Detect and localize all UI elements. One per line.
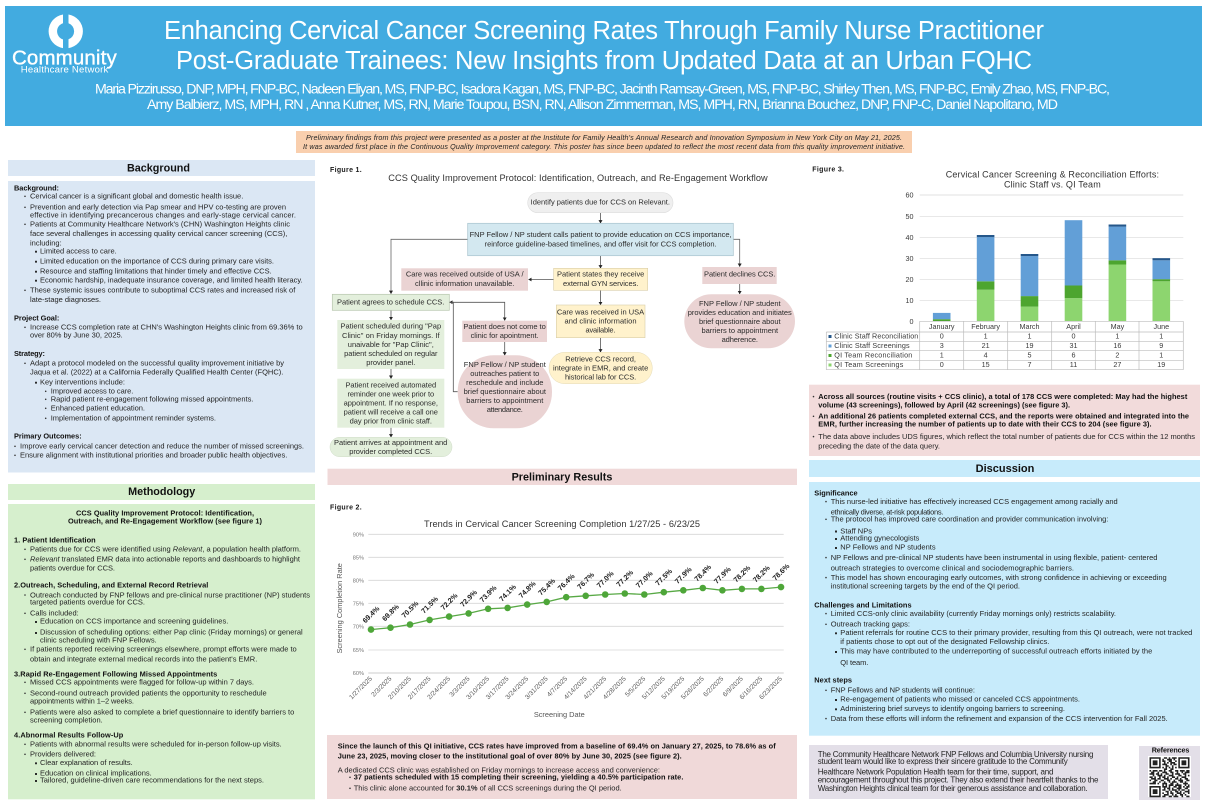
panel: discussion: The protocol has improved care coordination and provider communication involving:: [831, 515, 1108, 524]
panel: background: Implementation of appointment reminder systems.: [51, 414, 216, 423]
panel: methodology: Missed CCS appointments were flagged for follow-up within 7 days.: [30, 678, 254, 687]
data labels: 70.5%: [400, 599, 421, 620]
panel: figure 3 summary: Across all sources (routine visits + CCS clinic), a total of 178 CCS were completed: May had the highest: [818, 392, 1188, 401]
panel: background: Jaqua et al. (2022) at a California Federally Qualified Health Center (FQHC).: [30, 368, 283, 377]
figure 3: stacked bar chart with data table: [812, 167, 1183, 370]
panel: background: Strategy:: [14, 349, 45, 358]
panel: background: face several challenges in accessing quality cervical cancer screening (CCS),: [30, 229, 287, 238]
x axis date labels: 5/19/2025: [661, 675, 686, 701]
panel: methodology: [8, 504, 315, 799]
panel: background: Patients at Community Healthcare Network's (CHN) Washington Heights clinic: [30, 220, 290, 229]
y axis labels: 75%: [353, 601, 364, 607]
table values: 1: [984, 332, 988, 341]
panel: figure 3 summary: An additional 26 patients completed external CCS, and the reports were obtained and integrated into the: [818, 412, 1189, 421]
step: automated reminder: Patient received automated: [345, 380, 436, 389]
step: CCS completed: [330, 437, 452, 457]
panel: background: [8, 181, 315, 472]
panel: figure 3 summary: EMR, further increasing the number of patients up to date with their CCS to 204 (see figure 3).: [818, 420, 1152, 429]
step: retrieve record: historical lab for CCS.: [565, 372, 636, 381]
figure 1: workflow flowchart: CCS Quality Improvement Protocol: Identification, Outreach, and Re-Engagement Workflow: [388, 173, 768, 183]
data labels: [361, 561, 792, 625]
step: automated reminder: [337, 379, 444, 428]
panel: background: effective in identifying precancerous changes and early-stage cervical cancer.: [30, 211, 296, 220]
panel: preliminary results summary: [327, 735, 797, 799]
x axis date labels: 6/23/2025: [758, 675, 784, 701]
data labels: 78.2%: [751, 563, 772, 584]
panel: acknowledgements: [809, 745, 1108, 799]
y axis labels: 20: [906, 275, 914, 284]
step: retrieve record: [549, 352, 652, 384]
panel: methodology: Discussion of scheduling options: either Pap clinic (Friday mornings) or general: [40, 628, 303, 637]
step: missed appointment: Patient does not come to: [463, 322, 546, 331]
figure 3: stacked bar chart with data table: Cervical Cancer Screening & Reconciliation Efforts:: [946, 169, 1159, 179]
panel: background: Adapt a protocol modeled on the successful quality improvement initiative by: [30, 359, 284, 368]
title: [164, 17, 1044, 75]
panel: discussion: [809, 482, 1200, 736]
data labels: 76.7%: [575, 570, 596, 591]
step: automated reminder: appointment. If no response,: [344, 398, 438, 407]
step: education on decline: adherence.: [722, 335, 758, 344]
figure 3: stacked bar chart with data table: Figure 3.: [812, 167, 844, 174]
step: care outside USA: Care was received outside of USA /: [406, 270, 524, 279]
x axis date labels: 3/3/2025: [448, 675, 472, 699]
table values: 6: [1072, 351, 1076, 360]
panel: preliminary results summary: June 23, 2025, moving closer to the institutional goal of over 80% by June 30, 2025 (see figure 2).: [338, 752, 682, 761]
step: outreach to reschedule: reschedule and include: [466, 378, 543, 387]
panel: background: Background:: [14, 184, 59, 193]
panel: background: Key interventions include:: [40, 378, 125, 387]
data labels: 72.2%: [439, 591, 460, 612]
table values: February: [971, 322, 1000, 331]
step: pap clinic scheduled: provider panel.: [366, 358, 415, 367]
panel: figure 3 summary: The data above includes UDS figures, which reflect the total number of patients due for CCS within the 12 months: [818, 432, 1195, 441]
icon: QR code: [1148, 756, 1191, 797]
data labels: 77.0%: [595, 569, 616, 590]
step: care in USA: available.: [586, 325, 616, 334]
panel: references with QR code: References: [1152, 745, 1189, 754]
panel: discussion: This model has shown encouraging early outcomes, with strong confidence in achieving or exceeding: [831, 573, 1167, 582]
data labels: 71.5%: [419, 594, 440, 615]
panel: background: Limited access to care.: [40, 247, 117, 256]
panel: discussion: FNP Fellows and NP students will continue:: [831, 686, 975, 695]
panel: methodology: 2.Outreach, Scheduling, and External Record Retrieval: [14, 581, 208, 590]
panel: discussion: institutional screening targets by the end of the QI period.: [831, 582, 1020, 591]
panel: methodology: Calls included:: [30, 609, 79, 618]
panel: acknowledgements: Healthcare Network Population Health team for their time, support, and: [818, 767, 1053, 776]
panel: discussion: Staff NPs: [840, 526, 872, 535]
x axis date labels: 3/17/2025: [485, 675, 511, 701]
authors: [95, 81, 1110, 113]
flowchart connectors: [391, 213, 740, 437]
panel: background: Increase CCS completion rate at CHN's Washington Heights clinic from 69.36% to: [30, 323, 303, 332]
x axis date labels: 4/21/2025: [582, 675, 608, 701]
step: care in USA: [556, 305, 645, 338]
panel: discussion: NP Fellows and pre-clinical NP students have been instrumental in using flexible, patient- centered: [831, 553, 1157, 562]
panel: methodology: CCS Quality Improvement Protocol: Identification,: [76, 509, 254, 518]
table values: 5: [1028, 351, 1032, 360]
data labels: 72.9%: [458, 588, 479, 609]
panel: figure 3 summary: preceding the date of the data query.: [818, 442, 940, 451]
step: identify patients: Identify patients due for CCS on Relevant.: [531, 198, 670, 207]
table values: 1: [1159, 332, 1163, 341]
x axis date labels: 3/24/2025: [504, 675, 530, 701]
table values: 16: [1113, 341, 1121, 350]
authors: Maria Pizzirusso, DNP, MPH, FNP-BC, Nadeen Eliyan, MS, FNP-BC, Isadora Kagan, MS, FNP-BC, Jacinth Ramsay-Green, MS, FNP-BC, Shirley Then, MS, FNP-BC, Emily Zhao, MS, FNP-BC,: [95, 81, 1110, 97]
panel: discussion: Limited CCS-only clinic availability (currently Friday mornings only) restricts scalability.: [831, 609, 1116, 618]
x axis date labels: 5/12/2025: [641, 675, 667, 701]
panel: preliminary results summary: Since the launch of this QI initiative, CCS rates have improved from a baseline of 69.4% on January 27, 2025, to 78.6% as of: [338, 742, 776, 751]
step: care outside USA: cllinic information unavailable.: [415, 279, 514, 288]
step: outreach to reschedule: barriers to appointment: [466, 396, 544, 405]
table values: 11: [1070, 360, 1077, 369]
panel: methodology: Outreach, and Re-Engagement Workflow (see figure 1): [68, 517, 263, 526]
title: Post-Graduate Trainees: New Insights from Updated Data at an Urban FQHC: [176, 47, 1032, 75]
x axis date labels: 5/5/2025: [624, 675, 647, 699]
x axis date labels: 6/2/2025: [702, 675, 726, 699]
table values: 4: [984, 351, 988, 360]
table values: 2: [1115, 351, 1119, 360]
step: education on decline: brief questionnaire about: [699, 317, 782, 326]
table values: 19: [1026, 341, 1034, 350]
table values: March: [1020, 322, 1039, 331]
table legend: QI Team Reconciliation: [834, 351, 912, 360]
panel: methodology: clinic scheduling with FNP Fellows.: [40, 635, 157, 644]
y axis title: Screening Completion Rate: [335, 563, 344, 653]
panel: acknowledgements: The Community Healthcare Network FNP Fellows and Columbia University nursing: [818, 750, 1093, 759]
panel: discussion: NP Fellows and NP students: [840, 543, 936, 552]
x axis date labels: 5/26/2025: [680, 675, 706, 701]
panel: discussion: if patients chose to opt out of the designated Fellowship clinics.: [840, 637, 1049, 646]
table values: 19: [1157, 360, 1165, 369]
y axis labels: 50: [906, 212, 914, 221]
panel: methodology: Patients were also asked to complete a brief questionnaire to identify barriers to: [30, 708, 294, 717]
panel: preliminary results summary: A dedicated CCS clinic was established on Friday mornings to increase access and convenience:: [338, 766, 660, 775]
authors: Amy Balbierz, MS, MPH, RN , Anna Kutner, MS, RN, Marie Toupou, BSN, RN, Allison Zimmerman, MS, MPH, RN, Brianna Bouchez, DNP, FNP-C, Daniel Napolitano, MD: [147, 97, 1058, 113]
y axis labels: 80%: [353, 578, 364, 584]
data labels: 77.2%: [614, 568, 636, 589]
table values: 27: [1113, 360, 1121, 369]
step: outreach to reschedule: [458, 355, 552, 428]
panel: background: including:: [30, 239, 62, 248]
step: pap clinic scheduled: [337, 320, 444, 369]
step: call patient: [468, 223, 733, 256]
step: education on decline: barriers to appointment: [701, 326, 779, 335]
step: retrieve record: integrate in EMR, and create: [553, 364, 648, 372]
x axis date labels: 6/16/2025: [739, 675, 765, 701]
panel: background: Economic hardship, inadequate insurance coverage, and limited health literacy.: [40, 276, 303, 285]
panel: preliminary results summary: This clinic alone accounted for 30.1% of all CCS screenings during the QI period.: [354, 784, 622, 793]
heading: preliminary results: [328, 469, 797, 485]
table legend: [828, 332, 918, 369]
table values: 9: [1159, 341, 1163, 350]
panel: background: Prevention and early detection via Pap smear and HPV co-testing are proven: [30, 203, 286, 212]
data labels: 69.4%: [361, 604, 382, 625]
step: external GYN services: [554, 268, 648, 290]
x axis date labels: 2/10/2025: [387, 675, 413, 701]
figure 2: line chart: [330, 505, 792, 719]
step: education on decline: [684, 294, 795, 348]
table values: 0: [940, 332, 944, 341]
table values: 7: [1028, 360, 1032, 369]
panel: background: Rapid patient re-engagement following missed appointments.: [51, 395, 253, 404]
heading: preliminary results: Preliminary Results: [512, 471, 612, 483]
panel: background: over 80% by June 30, 2025.: [30, 331, 123, 340]
step: call patient: FNP Fellow / NP student calls patient to provide education on CCS importance,: [470, 230, 732, 239]
step: care in USA: and clinic information: [564, 316, 636, 325]
note: preliminary findings: Preliminary findings from this project were presented as a poster at the Institute for Family Health's Annual Research and Innovation Symposium in New York City on May 21, 2025.: [306, 133, 902, 142]
panel: references with QR code: [1139, 745, 1200, 800]
step: external GYN services: external GYN services.: [563, 279, 638, 288]
x axis date labels: 6/9/2025: [722, 675, 745, 699]
x axis date labels: 2/17/2025: [407, 675, 433, 701]
step: care outside USA: [401, 268, 528, 291]
panel: methodology: screening completion.: [30, 716, 103, 725]
panel: background: Project Goal:: [14, 314, 59, 323]
table values: 31: [1070, 341, 1078, 350]
panel: discussion: Next steps: [814, 676, 852, 685]
panel: acknowledgements: Washington Heights clinical team for their generous assistance and collaboration.: [818, 784, 1088, 793]
panel: background: These systemic issues contribute to suboptimal CCS rates and increased risk of: [30, 286, 296, 295]
panel: methodology: Patients with abnormal results were scheduled for in-person follow-up visits.: [30, 740, 282, 749]
panel: discussion: This may have contributed to the underreporting of successful outreach efforts initiated by the: [840, 647, 1152, 656]
panel: methodology: appointments within 1–2 weeks.: [30, 697, 134, 706]
y axis labels: 30: [906, 254, 914, 263]
panel: acknowledgements: encouragement throughout this project. They also extend their heartfelt thanks to the: [818, 775, 1099, 784]
panel: discussion: Re-engagement of patients who missed or canceled CCS appointments.: [840, 695, 1080, 704]
table legend: Clinic Staff Screenings: [834, 341, 910, 350]
table values: June: [1154, 322, 1169, 331]
step: education on decline: FNP Fellow / NP student: [699, 299, 782, 308]
panel: discussion: Patient referrals for routine CCS to their primary provider, resulting from this QI outreach, were not tracked: [840, 628, 1192, 637]
y axis labels: 85%: [353, 555, 364, 561]
step: automated reminder: patient will receive a call one: [344, 407, 438, 416]
panel: methodology: Providers delivered:: [30, 750, 96, 759]
step: identify patients: [528, 193, 673, 213]
y axis labels: 10: [906, 296, 914, 305]
panel: methodology: Relevant translated EMR data into actionable reports and dashboards to highlight: [30, 555, 301, 564]
table values: 1: [1159, 351, 1163, 360]
y axis labels: 40: [906, 233, 914, 242]
step: outreach to reschedule: FNP Fellow / NP student: [464, 360, 547, 369]
table values: [929, 322, 1169, 369]
panel: methodology: Second-round outreach provided patients the opportunity to reschedule: [30, 689, 267, 698]
panel: figure 3 summary: [809, 385, 1200, 456]
step: patient declines: [702, 267, 777, 284]
step: pap clinic scheduled: patient scheduled on regular: [344, 349, 438, 358]
panel: methodology: 1. Patient Identification: [14, 536, 96, 545]
table values: 15: [982, 360, 990, 369]
step: CCS completed: Patient arrives at appointment and: [334, 438, 447, 447]
panel: discussion: Attending gynecologists: [840, 534, 920, 543]
panel: background: Improve early cervical cancer detection and reduce the number of missed screenings.: [20, 442, 304, 451]
panel: methodology: Education on clinical implications.: [40, 769, 152, 778]
figure 3: stacked bar chart with data table: Clinic Staff vs. QI Team: [1004, 180, 1101, 190]
step: pap clinic scheduled: unaivable for "Pap Clinic",: [348, 340, 434, 349]
y axis labels: 65%: [353, 648, 364, 654]
step: call patient: reinforce guideline-based timelines, and offer visit for CCS completion.: [485, 239, 717, 248]
panel: discussion: QI team.: [840, 658, 868, 667]
table values: 0: [1072, 332, 1076, 341]
step: outreach to reschedule: attendance.: [487, 405, 523, 414]
figure 2: line chart: Trends in Cervical Cancer Screening Completion 1/27/25 - 6/23/25: [424, 519, 700, 529]
y axis labels: [353, 532, 364, 677]
table values: 21: [982, 341, 990, 350]
panel: methodology: Tailored, guideline-driven care recommendations for the next steps.: [40, 776, 264, 785]
panel: methodology: 3.Rapid Re-Engagement Following Missed Appointments: [14, 670, 217, 679]
table values: April: [1066, 322, 1081, 331]
panel: discussion: Outreach tracking gaps:: [831, 620, 910, 629]
data labels: 75.4%: [536, 576, 557, 597]
table values: 3: [940, 341, 944, 350]
panel: background: Ensure alignment with institutional priorities and broader public health objectives.: [20, 451, 287, 460]
step: pap clinic scheduled: Patient scheduled during "Pap: [340, 322, 441, 331]
step: care in USA: Care was received in USA: [557, 307, 644, 316]
panel: background: Improved access to care.: [51, 387, 133, 396]
table values: 1: [1115, 332, 1119, 341]
table legend: QI Team Screenings: [834, 360, 904, 369]
header banner: [5, 6, 1202, 126]
step: patient agrees: [332, 294, 449, 310]
step: pap clinic scheduled: Clinic" on Friday mornings. If: [342, 331, 441, 340]
y axis labels: 70%: [353, 624, 364, 630]
table values: 1: [940, 351, 944, 360]
data labels: 78.6%: [771, 561, 792, 582]
table values: January: [929, 322, 955, 331]
x axis date labels: 4/14/2025: [563, 675, 589, 701]
data labels: 73.9%: [478, 583, 499, 604]
x axis date labels: 2/24/2025: [426, 675, 452, 701]
step: automated reminder: day prior from clinic staff.: [350, 416, 432, 425]
heading: methodology: [8, 484, 315, 500]
x axis title: Screening Date: [534, 710, 585, 719]
data labels: 78.4%: [692, 562, 714, 583]
x axis date labels: 3/31/2025: [524, 675, 550, 701]
step: retrieve record: Retrieve CCS record,: [565, 354, 636, 364]
figure 1: workflow flowchart: Figure 1.: [330, 167, 362, 174]
panel: methodology: 4.Abnormal Results Follow-Up: [14, 731, 124, 740]
note: preliminary findings: [296, 131, 912, 153]
panel: background: Enhanced patient education.: [51, 404, 145, 413]
data labels: 74.1%: [497, 582, 518, 603]
data labels: 77.9%: [673, 564, 694, 586]
heading: background: Background: [127, 162, 190, 174]
heading: discussion: Discussion: [976, 463, 1035, 475]
step: missed appointment: clinic for apointment.: [471, 331, 539, 340]
step: CCS completed: provider completed CCS.: [349, 447, 432, 456]
table values: May: [1111, 322, 1125, 331]
panel: discussion: Significance: [814, 489, 858, 498]
y axis labels: 60%: [353, 671, 364, 677]
panel: discussion: Challenges and Limitations: [814, 601, 912, 610]
data labels: 78.2%: [731, 563, 753, 584]
data labels: 76.4%: [556, 571, 577, 593]
data labels: 74.8%: [517, 579, 538, 600]
x axis date labels: 4/28/2025: [602, 675, 628, 701]
panel: methodology: patients overdue for CCS.: [30, 564, 115, 573]
step: education on decline: provides education and initiates: [688, 308, 792, 317]
panel: background: Limited education on the importance of CCS during primary care visits.: [40, 257, 274, 266]
panel: figure 3 summary: volume (43 screenings), followed by April (42 screenings) (see figure 3).: [818, 400, 1070, 409]
figure 2: line chart: Figure 2.: [330, 505, 362, 512]
y axis labels: 0: [910, 317, 914, 326]
heading: background: [8, 160, 315, 176]
panel: background: Cervical cancer is a significant global and domestic health issue.: [30, 192, 243, 201]
data labels: 69.8%: [380, 602, 401, 623]
figure 1: workflow flowchart: [330, 167, 795, 457]
x axis date labels: 2/3/2025: [370, 675, 394, 699]
data labels: 77.0%: [634, 569, 655, 590]
table values: 1: [1028, 332, 1032, 341]
panel: discussion: Data from these efforts will inform the refinement and expansion of the CCS intervention for Fall 2025.: [831, 714, 1168, 723]
note: preliminary findings: It was awarded first place in the Continuous Quality Improvement category. This poster has since been updated to reflect the most recent data from this quality improvement initiative.: [303, 142, 905, 151]
panel: acknowledgements: student team would like to express their sincere gratitude to the Community: [818, 757, 1068, 766]
step: outreach to reschedule: outreaches patient to: [470, 369, 539, 378]
step: missed appointment: [462, 321, 547, 342]
title: Enhancing Cervical Cancer Screening Rates Through Family Nurse Practitioner: [164, 17, 1044, 45]
heading: discussion: [809, 460, 1200, 477]
panel: preliminary results summary: 37 patients scheduled with 15 completing their screening, yielding a 40.5% participation rate.: [354, 773, 683, 782]
icon: community healthcare network logo: Healthcare Network: [21, 64, 109, 76]
panel: discussion: This nurse-led initiative has effectively increased CCS engagement among racially and: [831, 497, 1118, 506]
x axis date labels: 1/27/2025: [348, 675, 374, 701]
panel: methodology: If patients reported receiving screenings elsewhere, prompt efforts were made to: [30, 645, 297, 654]
icon: community healthcare network logo: Community: [12, 46, 117, 69]
step: external GYN services: Patient states they receive: [557, 270, 644, 279]
data table: [826, 321, 1183, 370]
data labels: 77.5%: [653, 566, 675, 588]
panel: discussion: ethnically diverse, at-risk populations.: [831, 508, 943, 517]
step: patient declines: Patient declines CCS.: [704, 270, 775, 279]
table legend: Clinic Staff Reconciliation: [834, 332, 918, 341]
panel: background: Primary Outcomes:: [14, 432, 82, 441]
panel: background: late-stage diagnoses.: [30, 295, 101, 304]
panel: methodology: Outreach conducted by FNP fellows and pre-clinical nurse practitioner (NP) students: [30, 590, 310, 599]
panel: methodology: obtain and integrate external medical records into the patient's EMR.: [30, 655, 257, 664]
bars: [933, 220, 1170, 321]
step: outreach to reschedule: brief questionnaire about: [464, 387, 547, 396]
data labels: 77.9%: [712, 564, 733, 586]
step: patient agrees: Patient agrees to schedule CCS.: [337, 298, 444, 306]
panel: discussion: outreach strategies to overcome clinical and sociodemographic barriers.: [831, 564, 1074, 573]
x axis date labels: 3/10/2025: [465, 675, 491, 701]
panel: methodology: targeted patients overdue for CCS.: [30, 598, 145, 607]
y axis labels: 60: [906, 190, 914, 200]
heading: methodology: Methodology: [128, 486, 195, 498]
panel: methodology: Clear explanation of results.: [40, 758, 133, 767]
y axis labels: 90%: [353, 532, 364, 538]
step: automated reminder: reminder one week prior to: [347, 389, 434, 398]
x axis date labels: 4/7/2025: [546, 675, 569, 699]
panel: discussion: Administering brief surveys to identify ongoing barriers to screening.: [840, 704, 1065, 713]
x axis date labels: [348, 675, 784, 701]
table values: 0: [940, 360, 944, 369]
panel: methodology: Patients due for CCS were identified using Relevant, a population health platform.: [30, 545, 301, 554]
panel: methodology: Education on CCS importance and screening guidelines.: [40, 617, 228, 626]
panel: background: Resource and staffing limitations that hinder timely and effective CCS.: [40, 267, 272, 276]
y axis labels: [906, 190, 914, 326]
icon: community healthcare network logo: [12, 14, 117, 76]
data line and points: [368, 584, 784, 633]
